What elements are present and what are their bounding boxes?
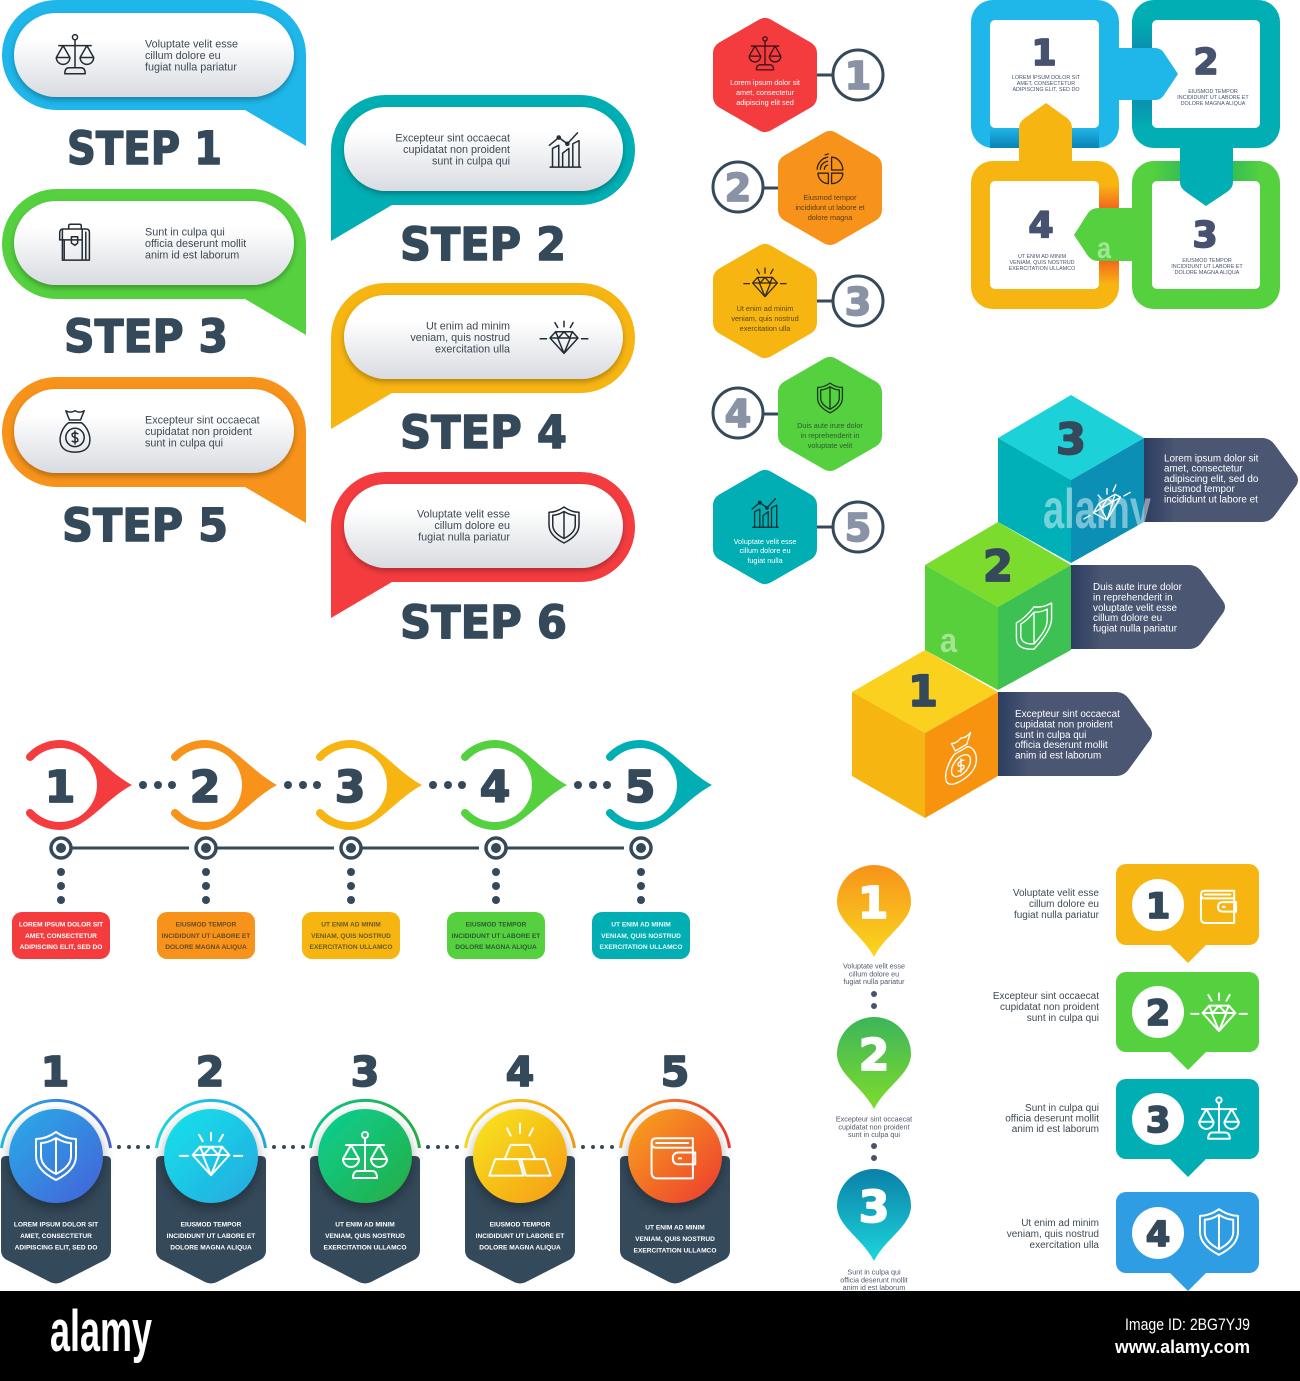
step 6 text: cillum dolore eu <box>434 520 510 532</box>
speech box 3: anim id est laborum <box>1012 1124 1099 1135</box>
card text 5: VENIAM, QUIS NOSTRUD <box>635 1236 715 1243</box>
speech box 1: Voluptate velit esse <box>1013 888 1099 899</box>
icon: wallet <box>652 1138 695 1178</box>
timeline text 1: ADIPISCING ELIT, SED DO <box>20 944 102 951</box>
square 4 label: EXERCITATION ULLAMCO <box>1009 266 1075 272</box>
step 6 text: Voluptate velit esse <box>417 508 510 520</box>
speech box 2: cupidatat non proident <box>1000 1002 1099 1013</box>
step 3 text: Sunt in culpa qui <box>145 226 225 238</box>
footer url: www.alamy.com <box>1114 1337 1250 1357</box>
pin 1: 1 <box>858 878 888 929</box>
pin 3 <box>837 1169 911 1292</box>
hexagon 1: 1 <box>845 54 871 98</box>
arrow: 4 to 1 <box>1019 103 1072 165</box>
timeline step 5: 5 <box>625 762 655 813</box>
arrow: 1 to 2 <box>1115 48 1178 100</box>
hexagon 3 text: Ut enim ad minim <box>737 304 793 313</box>
hexagon 2 <box>713 143 870 233</box>
pin 1 <box>837 865 911 986</box>
pin dots 2 <box>871 1143 877 1161</box>
timeline step 3 <box>302 740 422 959</box>
hexagon 4 text: voluptate velit <box>808 441 852 450</box>
square 3 label: 3 <box>1192 215 1218 256</box>
square 3 label <box>1171 215 1243 276</box>
watermarks: a <box>1241 882 1258 920</box>
timeline step 2 <box>157 740 277 959</box>
card text 2: DOLORE MAGNA ALIQUA <box>170 1244 252 1252</box>
speech box 1: 1 <box>1146 887 1170 927</box>
step bubble 4 <box>331 283 635 429</box>
square 4 label: 4 <box>1028 205 1054 246</box>
hexagon 5 text: cillum dolore eu <box>739 546 791 555</box>
step bubble 3 <box>2 189 306 335</box>
speech box 3 <box>1005 1079 1259 1177</box>
speech box 4: veniam, quis nostrud <box>1007 1229 1099 1240</box>
icon: shield <box>549 507 579 543</box>
step 4 text: veniam, quis nostrud <box>410 332 510 344</box>
isometric cube 2: 2 <box>983 542 1013 592</box>
circle card 4 <box>465 1048 575 1284</box>
card text 5: EXERCITATION ULLAMCO <box>634 1248 716 1254</box>
pin text 2: cupidatat non proident <box>838 1122 910 1132</box>
pin text 3: anim id est laborum <box>843 1283 905 1292</box>
timeline text 3: VENIAM, QUIS NOSTRUD <box>311 933 391 940</box>
hexagon 4 text: Duis aute irure dolor <box>797 421 863 430</box>
icon: scales <box>56 35 94 74</box>
isometric cube 3 <box>998 395 1144 563</box>
timeline step 1 <box>12 740 132 959</box>
icon: chart <box>549 133 581 167</box>
timeline step 5 <box>592 740 712 959</box>
step 1 text: cillum dolore eu <box>145 50 221 62</box>
label tag 1: sunt in culpa qui <box>1015 730 1086 741</box>
step 3 text: officia deserunt mollit <box>145 238 246 250</box>
square 3 label: DOLORE MAGNA ALIQUA <box>1175 270 1240 276</box>
label tag 3: eiusmod tempor <box>1164 484 1236 495</box>
watermarks: a <box>940 622 958 660</box>
square 4 label: VENIAM, QUIS NOSTRUD <box>1010 260 1075 266</box>
step 1 text: fugiat nulla pariatur <box>145 62 237 74</box>
icon: scales <box>1199 1097 1239 1139</box>
card text 2: EIUSMOD TEMPOR <box>181 1222 242 1228</box>
timeline text 2: DOLORE MAGNA ALIQUA <box>165 944 247 951</box>
step 2 text: cupidatat non proident <box>403 144 510 156</box>
circle row dots <box>117 1145 614 1149</box>
watermarks: a <box>890 878 912 930</box>
square 2 label: DOLORE MAGNA ALIQUA <box>1181 101 1246 107</box>
speech box 4: Ut enim ad minim <box>1021 1218 1099 1229</box>
footer bar <box>0 1291 1300 1381</box>
circle card 4: 4 <box>506 1048 534 1096</box>
speech box 2: 2 <box>1146 994 1170 1034</box>
square loop diagram <box>971 0 1280 309</box>
heading: step 4: STEP 4 <box>400 406 567 459</box>
timeline text 1: LOREM IPSUM DOLOR SIT <box>19 922 103 928</box>
label tag 2: cillum dolore eu <box>1093 613 1162 624</box>
pin text 3: officia deserunt mollit <box>840 1276 908 1284</box>
label tag 3: adipiscing elit, sed do <box>1164 474 1259 485</box>
pin text 2: sunt in culpa qui <box>848 1130 900 1139</box>
square 2 label: EIUSMOD TEMPOR <box>1188 89 1238 95</box>
isometric cube 1 <box>852 650 998 818</box>
pin text 3: Sunt in culpa qui <box>847 1268 901 1276</box>
speech box 4: exercitation ulla <box>1030 1240 1099 1251</box>
icon: shield <box>36 1132 76 1180</box>
label tag 3: Lorem ipsum dolor sit <box>1164 454 1259 464</box>
step 5 text: cupidatat non proident <box>145 426 252 438</box>
timeline text 5: VENIAM, QUIS NOSTRUD <box>601 933 681 940</box>
pin 2: 2 <box>859 1030 889 1081</box>
timeline text 4: DOLORE MAGNA ALIQUA <box>455 944 537 951</box>
icon: diamond <box>540 321 588 353</box>
hexagon 1 text: adipiscing elit sed <box>736 98 794 107</box>
hexagon 3 <box>725 256 883 346</box>
pin text 1: Voluptate velit esse <box>843 962 905 970</box>
speech box 4: 4 <box>1146 1215 1170 1255</box>
speech box 3: Sunt in culpa qui <box>1025 1103 1099 1114</box>
hexagon 4: 4 <box>725 392 751 436</box>
label tag 2 <box>1071 565 1225 649</box>
isometric cube 1: 1 <box>908 667 938 717</box>
circle card 5: 5 <box>661 1048 689 1096</box>
label tag 1: anim id est laborum <box>1015 750 1101 762</box>
heading: step 5: STEP 5 <box>62 499 228 552</box>
card text 5: UT ENIM AD MINIM <box>645 1224 705 1232</box>
card text 4: DOLORE MAGNA ALIQUA <box>479 1244 561 1252</box>
icon: money bag <box>946 729 976 790</box>
hexagon 3 text: exercitation ulla <box>740 324 791 333</box>
footer logo: alamy <box>50 1299 152 1364</box>
label tag 1: cupidatat non proident <box>1015 720 1113 730</box>
watermarks: a <box>1097 232 1111 265</box>
square 3 label: INCIDIDUNT UT LABORE ET <box>1171 264 1243 270</box>
icon: diamond <box>1084 475 1130 533</box>
timeline step 4 <box>447 740 567 959</box>
circle card 2 <box>156 1048 266 1284</box>
timeline step 3: 3 <box>335 762 365 813</box>
heading: step 6: STEP 6 <box>400 596 567 649</box>
speech box 2: sunt in culpa qui <box>1027 1013 1099 1024</box>
isometric cube 3: 3 <box>1056 415 1086 465</box>
hexagon 5: 5 <box>845 506 871 550</box>
icon: diamond <box>744 268 786 297</box>
label tag 2: fugiat nulla pariatur <box>1093 624 1178 634</box>
square 4 label: UT ENIM AD MINIM <box>1018 254 1067 260</box>
speech box 2 <box>993 972 1259 1070</box>
label tag 1: officia deserunt mollit <box>1015 740 1108 751</box>
label tag 1: Excepteur sint occaecat <box>1015 709 1120 720</box>
hexagon 5 <box>725 482 883 572</box>
step 5 text: Excepteur sint occaecat <box>145 414 260 426</box>
speech box 4 <box>1007 1192 1259 1291</box>
timeline text 4: INCIDIDUNT UT LABORE ET <box>452 933 540 940</box>
timeline line <box>72 846 624 850</box>
step 2 text: sunt in culpa qui <box>432 156 510 168</box>
hexagon 2 text: Eiusmod tempor <box>803 193 857 202</box>
label tag 2: Duis aute irure dolor <box>1093 582 1183 593</box>
hexagon 4 text: in reprehenderit in <box>801 431 859 440</box>
icon: diamond <box>1191 993 1247 1031</box>
icon: shield <box>1016 597 1052 659</box>
hexagon 1 text: amet, consectetur <box>736 88 795 97</box>
circle card 3 <box>310 1048 420 1284</box>
icon: shield <box>818 383 842 413</box>
step bubble 2 <box>331 95 635 241</box>
hexagon 2: 2 <box>725 166 751 210</box>
step bubble 1 <box>2 0 306 146</box>
pin text 2: Excepteur sint occaecat <box>836 1114 912 1124</box>
label tag 3: incididunt ut labore et <box>1164 494 1258 506</box>
timeline step 2: 2 <box>190 762 220 813</box>
heading: step 1: STEP 1 <box>67 122 222 175</box>
step 3 text: anim id est laborum <box>145 250 239 262</box>
square 1 label: ADIPISCING ELIT, SED DO <box>1012 87 1080 93</box>
circle card 1 <box>1 1048 111 1284</box>
icon: shield <box>1200 1209 1238 1255</box>
card text 3: UT ENIM AD MINIM <box>335 1222 395 1228</box>
pin dots 1 <box>871 991 877 1009</box>
icon: pie chart <box>817 154 843 184</box>
speech box 3: 3 <box>1146 1101 1170 1141</box>
hexagon 3 text: veniam, quis nostrud <box>731 314 799 323</box>
speech box 3: officia deserunt mollit <box>1005 1114 1099 1124</box>
pin 3: 3 <box>859 1182 889 1233</box>
watermarks <box>890 232 1258 930</box>
icon: diamond <box>180 1133 242 1175</box>
timeline step 1: 1 <box>45 762 75 813</box>
square 1 label: 1 <box>1031 33 1057 74</box>
speech box 2: Excepteur sint occaecat <box>993 991 1099 1002</box>
pin text 1: cillum dolore eu <box>849 970 899 978</box>
label tag 3 <box>1144 438 1298 522</box>
hexagon 2 text: incididunt ut labore et <box>795 203 865 212</box>
label tag 1 <box>998 692 1152 776</box>
step bubble 5 <box>2 377 306 523</box>
pin 2 <box>836 1017 912 1139</box>
step 4 text: Ut enim ad minim <box>426 320 510 332</box>
label tag 2: voluptate velit esse <box>1093 603 1177 614</box>
timeline text 2: EIUSMOD TEMPOR <box>176 922 237 928</box>
timeline text 3: EXERCITATION ULLAMCO <box>310 944 392 951</box>
timeline text 4: EIUSMOD TEMPOR <box>466 922 527 928</box>
timeline step 4: 4 <box>480 762 510 813</box>
square 1 label: AMET, CONSECTETUR <box>1017 81 1075 87</box>
speech box 1: fugiat nulla pariatur <box>1014 910 1100 921</box>
heading: step 2: STEP 2 <box>400 218 566 271</box>
icon: briefcase <box>60 224 89 260</box>
circle card 1: 1 <box>41 1048 69 1096</box>
arrow: 3 to 4 <box>1074 208 1135 261</box>
square 4 label <box>1009 205 1075 272</box>
label tag 2: in reprehenderit in <box>1093 592 1173 604</box>
card text 1: LOREM IPSUM DOLOR SIT <box>14 1222 98 1228</box>
circle card 3: 3 <box>351 1048 379 1096</box>
hexagon 4 <box>713 369 870 459</box>
icon: wallet <box>1201 891 1236 923</box>
hexagon 1 text: Lorem ipsum dolor sit <box>730 78 800 87</box>
step 4 text: exercitation ulla <box>435 344 510 356</box>
square 2 label <box>1177 42 1249 107</box>
icon: gold bars <box>489 1124 551 1176</box>
watermarks: alamy <box>1043 477 1151 540</box>
square 1 label <box>1012 33 1081 93</box>
square 1 label: LOREM IPSUM DOLOR SIT <box>1012 75 1081 81</box>
card text 4: INCIDIDUNT UT LABORE ET <box>476 1233 564 1240</box>
timeline text 5: UT ENIM AD MINIM <box>611 922 671 928</box>
step bubble 6 <box>331 472 635 618</box>
card text 2: INCIDIDUNT UT LABORE ET <box>167 1233 255 1240</box>
timeline text 2: INCIDIDUNT UT LABORE ET <box>162 933 250 940</box>
isometric cube 2 <box>925 522 1071 690</box>
icon: chart <box>752 499 778 527</box>
card text 3: EXERCITATION ULLAMCO <box>324 1244 406 1252</box>
speech box 1: cillum dolore eu <box>1029 899 1099 910</box>
square 2 label: 2 <box>1193 42 1219 83</box>
card text 4: EIUSMOD TEMPOR <box>490 1222 551 1228</box>
timeline dots <box>139 781 611 789</box>
heading: step 3: STEP 3 <box>64 310 228 363</box>
circle card 2: 2 <box>196 1048 224 1096</box>
circle card 5 <box>620 1048 730 1284</box>
step 6 text: fugiat nulla pariatur <box>418 532 510 544</box>
card text 1: AMET, CONSECTETUR <box>20 1233 92 1240</box>
hexagon 3: 3 <box>845 280 871 324</box>
square 2 label: INCIDIDUNT UT LABORE ET <box>1177 95 1249 101</box>
pin text 1: fugiat nulla pariatur <box>843 977 905 986</box>
step 2 text: Excepteur sint occaecat <box>395 132 510 144</box>
footer image id: Image ID: 2BG7YJ9 <box>1125 1315 1250 1334</box>
hexagon 2 text: dolore magna <box>808 213 853 222</box>
icon: money bag <box>60 411 90 452</box>
hexagon 1 <box>725 30 883 120</box>
timeline text 3: UT ENIM AD MINIM <box>321 922 381 928</box>
icon: scales <box>343 1132 387 1178</box>
timeline text 5: EXERCITATION ULLAMCO <box>600 944 682 951</box>
label tag 3: amet, consectetur <box>1164 464 1243 474</box>
hexagon 5 text: fugiat nulla <box>747 556 784 565</box>
card text 3: VENIAM, QUIS NOSTRUD <box>325 1233 405 1240</box>
timeline text 1: AMET, CONSECTETUR <box>25 933 97 940</box>
speech box 1 <box>1013 864 1259 963</box>
step 1 text: Voluptate velit esse <box>145 38 238 50</box>
square 3 label: EIUSMOD TEMPOR <box>1182 258 1232 264</box>
card text 1: ADIPISCING ELIT, SED DO <box>15 1244 97 1252</box>
arrow: 2 to 3 <box>1180 145 1233 206</box>
step 5 text: sunt in culpa qui <box>145 438 223 450</box>
hexagon 5 text: Voluptate velit esse <box>734 537 796 546</box>
icon: scales <box>749 37 781 70</box>
